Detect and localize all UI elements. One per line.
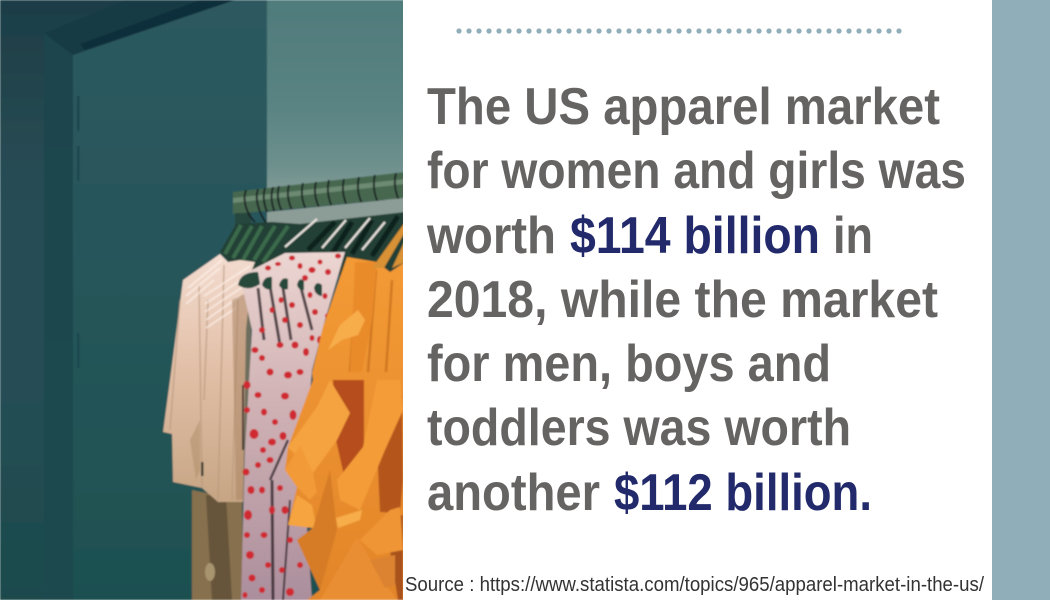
main statement text: toddlers was worth	[427, 399, 851, 457]
dark ruffle interior	[333, 380, 364, 480]
main statement text: for men, boys and	[427, 335, 831, 393]
photo: clothing rack against teal wall	[0, 0, 405, 600]
main statement text: in	[833, 207, 873, 265]
white text panel	[403, 0, 992, 600]
main statement text: The US apparel market	[427, 78, 940, 136]
main statement text: worth	[426, 207, 556, 265]
orange ruffled garments	[285, 222, 405, 600]
right accent band	[992, 0, 1050, 600]
light ruffle flaps	[288, 380, 350, 473]
main statement text: for women and girls was	[427, 142, 966, 200]
floral dresses with red dots	[240, 252, 345, 600]
beige knit sweaters and trousers	[163, 254, 255, 600]
highlight: $112 billion: $112 billion.	[614, 464, 872, 522]
wall shadow behind hangers	[267, 198, 405, 232]
main statement text: 2018, while the market	[427, 271, 938, 329]
straps	[372, 222, 405, 268]
clothes rail with hooks	[233, 172, 405, 225]
main statement text	[426, 78, 966, 522]
highlight: $114 billion: $114 billion	[570, 207, 820, 265]
background: wall and door frame	[0, 0, 405, 600]
hangers	[220, 212, 405, 275]
upper fold shading	[350, 270, 392, 372]
source line: Source : https://www.statista.com/topics/965/apparel-market-in-the-us/	[405, 574, 984, 596]
dark hanger hooks over the dresses	[238, 272, 322, 296]
dotted divider	[456, 28, 902, 34]
main statement text: another	[427, 464, 600, 522]
